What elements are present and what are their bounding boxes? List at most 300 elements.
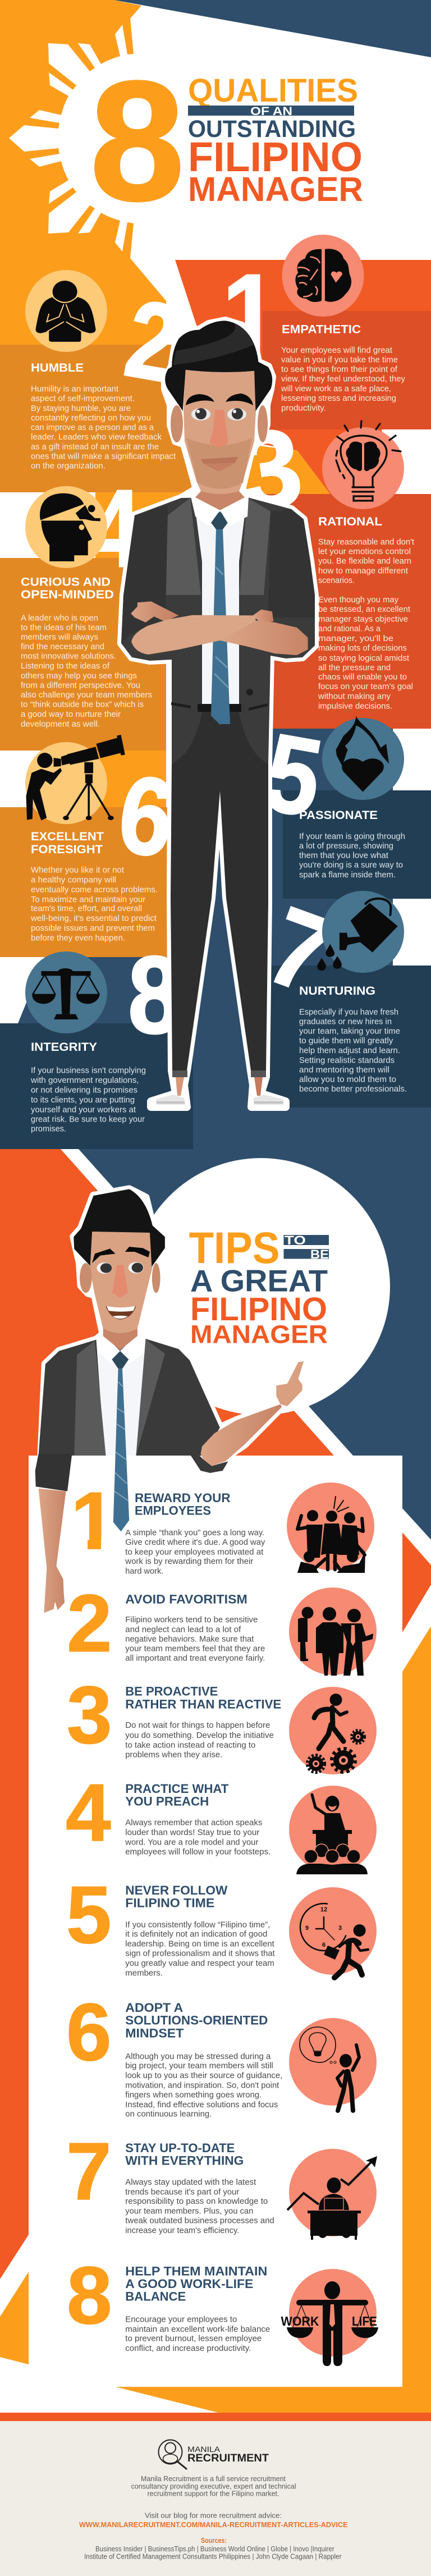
heading: rational: RATIONAL	[318, 515, 382, 528]
text: integrity body: promises.	[31, 1124, 66, 1133]
body: motivation, and inspiration. So, don't point	[125, 2081, 279, 2090]
heading: curious and open-minded	[21, 576, 114, 601]
body: your team members. Plus, you can	[125, 2207, 253, 2216]
text: passionate body: a lot of pressure, showing	[299, 841, 393, 850]
text: integrity body: If your business isn't complying	[31, 1067, 146, 1076]
text: passionate body	[299, 832, 405, 880]
heading: curious and open-minded: OPEN-MINDED	[21, 588, 114, 601]
body: and neglect can lead to a lot of	[125, 1625, 241, 1634]
panel: nurturing	[299, 891, 407, 1094]
tip 7	[66, 2126, 377, 2240]
title: qualities: QUALITIES	[188, 72, 358, 109]
body: your team members feel that they are	[125, 1645, 265, 1654]
pointing hand	[276, 1361, 304, 1406]
text: nurturing body: your team, taking your time	[299, 1027, 400, 1036]
text: humble body: aspect of self-improvement.	[31, 395, 135, 404]
text: foresight body: possible issues and prevent them	[31, 924, 155, 933]
ears	[80, 1263, 161, 1293]
body: fingers when something goes wrong.	[125, 2091, 262, 2100]
text: curious body: also challenge your team members	[21, 690, 152, 699]
colour bands behind qualities	[0, 260, 431, 1540]
heading	[125, 1782, 229, 1809]
text: sources heading: Sources:	[201, 2536, 227, 2545]
text: rational body: making lots of decisions	[318, 644, 407, 653]
title	[90, 46, 363, 236]
hair	[165, 321, 272, 411]
tie	[209, 511, 230, 725]
logo: manila recruitment	[158, 2440, 269, 2469]
body: Although you may be stressed during a	[125, 2052, 271, 2061]
face	[89, 1232, 153, 1333]
nose	[112, 1265, 128, 1298]
body: increase your team's efficiency.	[125, 2226, 239, 2235]
body: conflict, and increase productivity.	[125, 2344, 251, 2353]
white tips card	[29, 1456, 402, 2387]
body: employees will follow in your footsteps.	[125, 1848, 270, 1857]
pockets and button	[171, 689, 268, 711]
body: Do not wait for things to happen before	[125, 1721, 270, 1730]
title: a great: A GREAT	[190, 1264, 328, 1298]
heading: integrity: INTEGRITY	[31, 1041, 97, 1054]
body: Give credit where it's due. A good way	[125, 1538, 265, 1547]
icon: flaming heart	[322, 716, 404, 800]
panel: humble	[25, 270, 176, 471]
body: Filipino workers tend to be sensitive	[125, 1616, 258, 1625]
body: big project, your team members will still	[125, 2062, 273, 2071]
heading: NEVER FOLLOW	[125, 1883, 228, 1897]
heading	[125, 2001, 268, 2040]
text: nurturing body	[299, 1008, 407, 1094]
title: to	[284, 1233, 329, 1247]
text: humble body: Humility is an important	[31, 385, 118, 394]
body: on continuous learning.	[125, 2110, 212, 2119]
top navy wedge	[114, 0, 431, 57]
number: 1	[71, 1475, 116, 1566]
text: sources list: Business Insider | BusinessTips.ph | Business World Online | Globe | Inovo |Inquirer	[95, 2545, 334, 2553]
icon: person at desk with rising arrow	[287, 2149, 377, 2240]
icon: watering can	[317, 891, 404, 973]
tip 5	[66, 1869, 377, 1978]
body: Always remember that action speaks	[125, 1819, 262, 1828]
sun background	[0, 0, 166, 345]
body	[125, 1529, 265, 1576]
heading: passionate: PASSIONATE	[299, 809, 378, 822]
text: curious body: A leader who is open	[21, 614, 98, 623]
body: negative behaviors. Make sure that	[125, 1635, 254, 1644]
tip 1	[76, 1483, 374, 1574]
text: humble body: can improve as a person and as a	[31, 423, 154, 432]
body: Always stay updated with the latest	[125, 2178, 256, 2187]
text: foresight body	[30, 866, 158, 942]
text: integrity body: or not delivering its promises	[31, 1086, 137, 1095]
text: rational body: let your emotions control	[318, 547, 411, 556]
heading: empathetic: EMPATHETIC	[282, 323, 361, 336]
tip 4	[66, 1767, 377, 1874]
text: curious body: from a different perspective. You	[21, 681, 140, 690]
lapels	[166, 498, 270, 595]
text: passionate body: you're doing is a sure way to	[299, 861, 403, 870]
body: you greatly value and respect your team	[125, 1959, 274, 1968]
mouth	[201, 457, 238, 472]
collar	[191, 488, 249, 526]
icon: person with telescope	[25, 735, 125, 824]
illustration: pointing manager upper body	[39, 1189, 302, 1456]
text: nurturing body: help them adjust and learn.	[299, 1046, 400, 1055]
sleeves	[121, 505, 315, 643]
number 2: 2	[117, 276, 189, 406]
body: to take action instead of reacting to	[125, 1741, 255, 1750]
body	[125, 2052, 282, 2119]
text: curious body: Listening to the ideas of	[21, 662, 110, 671]
title: outstanding: OUTSTANDING	[188, 116, 356, 143]
body: sign of professionalism and it shows that	[125, 1950, 275, 1959]
panel: rational	[318, 421, 431, 711]
text: integrity body: yourself and your workers at	[31, 1105, 136, 1114]
icon: lightbulb brain	[322, 421, 431, 509]
title: be	[284, 1247, 329, 1261]
text: curious body: to “think outside the box” which is	[21, 701, 144, 710]
text: rational body: Even though you may	[318, 596, 399, 605]
text: curious body: find the necessary and	[21, 642, 104, 651]
text: rational body: focus on your team's goal	[318, 683, 413, 692]
body: word. You are a role model and your	[125, 1838, 258, 1847]
tie	[112, 1351, 129, 1531]
text: rational body: all the pressure and	[318, 664, 391, 672]
number: 8	[67, 2250, 112, 2341]
body: all important and treat everyone fairly.	[125, 1654, 265, 1663]
panel: excellent foresight	[25, 735, 158, 942]
number 4: 4	[90, 467, 140, 590]
heading	[125, 2141, 244, 2168]
number: 3	[67, 1669, 112, 1760]
number 6: 6	[112, 752, 181, 881]
heading: nurturing: NURTURING	[299, 985, 375, 998]
eyes	[191, 408, 246, 420]
jacket front panels	[172, 660, 268, 764]
body: If you consistently follow “Filipino time”,	[125, 1920, 270, 1929]
body: trends because it's part of your	[125, 2188, 239, 2197]
body: A simple “thank you” goes a long way.	[125, 1529, 264, 1538]
text: passionate body: If your team is going through	[299, 832, 405, 841]
panel: empathetic	[281, 235, 406, 413]
body	[125, 1819, 270, 1857]
text: foresight body: team's time, effort, and overall	[31, 904, 142, 913]
heading: AVOID FAVORITISM	[125, 1593, 247, 1607]
number 5: 5	[256, 710, 330, 840]
text: company description: recruitment support for the Filipino market.	[147, 2490, 279, 2498]
tip 8	[67, 2250, 378, 2366]
title: be: BE	[310, 1247, 329, 1261]
heading: WITH EVERYTHING	[125, 2154, 244, 2168]
heading	[135, 1491, 231, 1517]
text: rational body: be stressed, an excellent	[318, 605, 410, 614]
body: you do something. Develop the initiative	[125, 1731, 274, 1740]
raised forearm	[201, 1404, 282, 1466]
body: to keep your employees motivated at	[125, 1548, 263, 1557]
text: curious body: to the ideas of his team	[21, 623, 107, 632]
tip 2	[67, 1578, 377, 1676]
text: curious body: a good way to nurture their	[21, 710, 121, 719]
text: rational body: manager stays objective	[318, 615, 408, 624]
body: Instead, find effective solutions and focus	[125, 2101, 278, 2110]
body: it is definitely not an indication of good	[125, 1930, 267, 1939]
icon: late runner and clock: 3	[338, 1925, 342, 1932]
heading: YOU PREACH	[125, 1795, 209, 1809]
body: leadership. Being on time is an excellent	[125, 1939, 274, 1948]
heading: PRACTICE WHAT	[125, 1782, 229, 1796]
title bar: of an	[188, 105, 354, 118]
text: sources list: Institute of Certified Management Consultants Philippines | John Clyde Cagaan | Rappler	[84, 2552, 342, 2561]
text: rational body: scenarios.	[318, 576, 355, 585]
icon: runner on gears	[289, 1687, 377, 1774]
text: sources list	[84, 2545, 342, 2561]
text: empathetic body: lessening stress and increasing	[281, 394, 396, 403]
text: foresight body: a healthy company will	[31, 876, 116, 885]
title: filipino: FILIPINO	[190, 1291, 327, 1328]
text: curious body: others may help you see things	[21, 672, 137, 681]
heading: BE PROACTIVE	[125, 1685, 218, 1699]
text: company description	[131, 2474, 296, 2498]
shoes	[156, 1077, 283, 1105]
text: rational body: Stay reasonable and don't	[318, 538, 414, 547]
eyebrows	[92, 1247, 150, 1263]
title: filipino: FILIPINO	[188, 134, 363, 180]
heading: RATHER THAN REACTIVE	[125, 1697, 281, 1711]
text: foresight body: To maximize and maintain your	[31, 895, 145, 904]
eyebrows	[186, 394, 253, 405]
body: hard work.	[125, 1567, 163, 1576]
text: empathetic body: view. If they feel understood, they	[281, 375, 406, 384]
icon: late runner and clock: 6	[322, 1942, 325, 1948]
number 1: 1	[222, 251, 278, 374]
sleeve end	[190, 1454, 228, 1473]
footer panel	[0, 2421, 431, 2576]
title bar: of an: OF AN	[250, 105, 292, 118]
smile	[106, 1306, 136, 1320]
orange footer bar	[0, 2413, 431, 2421]
body: responsibility to pass on knowledge to	[125, 2197, 268, 2206]
icon: brain with heart	[282, 235, 364, 317]
heading: A GOOD WORK-LIFE	[125, 2277, 253, 2291]
left sleeve	[35, 1454, 72, 1491]
big white circle behind tips title	[132, 1158, 390, 1415]
text: company description: Manila Recruitment is a full service recruitment	[141, 2474, 286, 2483]
body	[125, 1721, 274, 1760]
number: 7	[66, 2126, 112, 2217]
title: manager: MANAGER	[190, 1320, 328, 1349]
heading: HELP THEM MAINTAIN	[125, 2264, 267, 2278]
neck	[195, 483, 245, 510]
body: Encourage your employees to	[125, 2316, 237, 2325]
heading: REWARD YOUR	[135, 1491, 231, 1505]
body: to prevent burnout, lessen employee	[125, 2335, 262, 2344]
text: rational body: without making any	[318, 692, 391, 701]
text: nurturing body: graduates or new hires in	[299, 1018, 392, 1027]
text: rational body: manager, you'll be	[318, 634, 393, 643]
text: empathetic body	[281, 346, 406, 413]
text: empathetic body: productivity.	[281, 404, 326, 413]
text: humble body: By staying humble, you are	[31, 404, 131, 413]
heading: excellent foresight	[31, 830, 104, 856]
text: integrity body: great risk. Be sure to keep your	[31, 1115, 145, 1124]
face	[184, 370, 256, 494]
icon: late runner and clock: 9	[305, 1925, 309, 1932]
body: members.	[125, 1969, 163, 1978]
icon: work life balance figure	[281, 2269, 378, 2366]
icon: thinking person with bulb	[289, 2018, 377, 2111]
tip 3	[67, 1669, 377, 1774]
body	[125, 2178, 274, 2235]
number: 2	[67, 1578, 112, 1669]
icon: work life balance figure: LIFE	[352, 2314, 377, 2328]
jacket	[121, 497, 315, 764]
jaw shade	[186, 438, 252, 489]
text: empathetic body: will view work as a safe place,	[281, 385, 391, 394]
heading: FILIPINO TIME	[125, 1896, 214, 1910]
body: tweak outdated business processes and	[125, 2217, 274, 2226]
icon: open head with climber	[25, 486, 107, 568]
text: rational body: so staying logical amidst	[318, 654, 409, 663]
text: nurturing body: allow you to mold them to	[299, 1075, 396, 1084]
text: foresight body: well-being, it's essential to predict	[30, 914, 157, 923]
icon: three people	[289, 1587, 377, 1676]
text: blog url: WWW.MANILARECRUITMENT.COM/MANILA-RECRUITMENT-ARTICLES-ADVICE	[79, 2520, 348, 2529]
text: nurturing body: Especially if you have fresh	[299, 1008, 398, 1017]
cuffs	[172, 1070, 266, 1077]
heading	[125, 2264, 267, 2303]
text: empathetic body: value in you if you take the time	[281, 356, 398, 365]
text: curious body	[21, 614, 152, 729]
crossed arms	[131, 601, 308, 655]
text: foresight body: before they even happen.	[31, 934, 125, 942]
text: integrity body: to its clients, you are putting	[31, 1096, 135, 1105]
number: 6	[66, 1987, 112, 2078]
text: humble body: on the organization.	[31, 462, 106, 471]
body: look up to you as their source of guidance,	[125, 2071, 282, 2080]
heading: excellent foresight: EXCELLENT	[31, 830, 104, 843]
big number 8: 8	[90, 46, 185, 236]
title: to: TO	[285, 1233, 306, 1247]
collar	[96, 1334, 145, 1364]
text: nurturing body: and mentoring them will	[299, 1066, 389, 1075]
panel: curious and open-minded	[21, 486, 152, 729]
text: curious body: most innovative solutions.	[21, 652, 116, 661]
text: humble body: ones that will make a significant impact	[31, 452, 176, 461]
heading: humble: HUMBLE	[31, 362, 84, 374]
logo: manila recruitment: RECRUITMENT	[187, 2453, 269, 2464]
text: company description: consultancy providing executive, expert and technical	[131, 2482, 296, 2490]
ears	[171, 405, 268, 442]
text: nurturing body: to guide them will greatly	[299, 1037, 393, 1046]
heading: BALANCE	[125, 2289, 186, 2303]
panel: integrity	[25, 951, 146, 1133]
nose	[209, 410, 228, 448]
text: empathetic body: Your employees will find great	[281, 346, 392, 355]
section: tips title	[189, 1223, 329, 1349]
logo: manila recruitment: MANILA	[187, 2445, 220, 2454]
body	[125, 1616, 265, 1663]
belt	[198, 704, 241, 712]
text: rational body: and rational. As a	[318, 625, 380, 634]
tip 6	[66, 1987, 377, 2119]
heading: excellent foresight: FORESIGHT	[31, 843, 103, 856]
shirt	[194, 497, 247, 704]
text: integrity body	[30, 1067, 146, 1133]
illustration: manager with crossed arms	[121, 321, 315, 1107]
body	[125, 2316, 270, 2353]
heading: STAY UP-TO-DATE	[125, 2141, 235, 2155]
illustration: pointing manager arm and tie	[35, 1351, 304, 1613]
text: passionate body: them that you love what	[299, 852, 388, 861]
icon: cheering team	[287, 1483, 374, 1573]
neck	[103, 1326, 137, 1350]
text: nurturing body: become better professionals.	[299, 1085, 407, 1094]
icon: work life balance figure: WORK	[281, 2314, 319, 2328]
title: tips: TIPS	[189, 1223, 279, 1273]
text: integrity body: with government regulations,	[30, 1076, 139, 1085]
text: rational body: chaos will enable you to	[318, 673, 407, 682]
body: work is by rewarding them for their	[125, 1557, 253, 1566]
heading	[125, 1685, 281, 1711]
text: curious body: development as well.	[21, 720, 100, 729]
heading: curious and open-minded: CURIOUS AND	[21, 576, 111, 589]
icon: humble praying figure	[25, 270, 107, 352]
heading: ADOPT A	[125, 2001, 183, 2015]
number 7: 7	[253, 883, 348, 1018]
number: 5	[66, 1869, 112, 1960]
shirt	[96, 1339, 146, 1456]
number 3: 3	[231, 404, 309, 534]
text: rational body: you. Be flexible and learn	[318, 557, 411, 566]
lapels	[74, 1339, 165, 1456]
hanging hand	[39, 1489, 66, 1613]
number: 4	[66, 1767, 111, 1858]
text: rational body: impulsive decisions.	[318, 702, 392, 711]
heading: EMPLOYEES	[135, 1503, 211, 1517]
text: humble body: constantly reflecting on how you	[31, 414, 151, 423]
icon: late runner and clock: 12	[320, 1906, 327, 1913]
right side strip shapes	[0, 1456, 431, 2413]
text: nurturing body: Setting realistic standards	[299, 1056, 395, 1065]
text: foresight body: eventually come across problems.	[31, 886, 158, 895]
heading	[125, 1883, 228, 1910]
jacket	[39, 1339, 220, 1456]
body	[125, 1920, 275, 1978]
heading: SOLUTIONS-ORIENTED	[125, 2014, 268, 2028]
body: maintain an excellent work-life balance	[125, 2325, 270, 2334]
text: empathetic body: to see things from their point of	[281, 365, 398, 374]
icon: late runner and clock	[289, 1887, 377, 1978]
icon: balance scales	[25, 951, 107, 1033]
text: rational body: how to manage different	[318, 566, 408, 575]
text: rational body	[318, 538, 414, 711]
text: passionate body: spark a flame inside them.	[299, 871, 396, 880]
text: humble body: as a gift instead of an insult are the	[31, 443, 159, 452]
heading: MINDSET	[125, 2026, 184, 2040]
text: foresight body: Whether you like it or not	[31, 866, 124, 875]
text: blog prompt: Visit our blog for more recruitment advice:	[145, 2511, 282, 2520]
title: manager: MANAGER	[188, 170, 363, 208]
body: problems when they arise.	[125, 1751, 222, 1760]
text: humble body: leader. Leaders who view feedback	[31, 433, 162, 442]
eyes	[97, 1262, 144, 1274]
body: louder than words! Stay true to your	[125, 1828, 259, 1837]
icon: speaker at lectern	[289, 1786, 377, 1874]
panel: passionate	[299, 716, 405, 880]
hair	[74, 1189, 165, 1267]
trousers	[171, 704, 268, 1070]
number 8: 8	[128, 934, 181, 1056]
